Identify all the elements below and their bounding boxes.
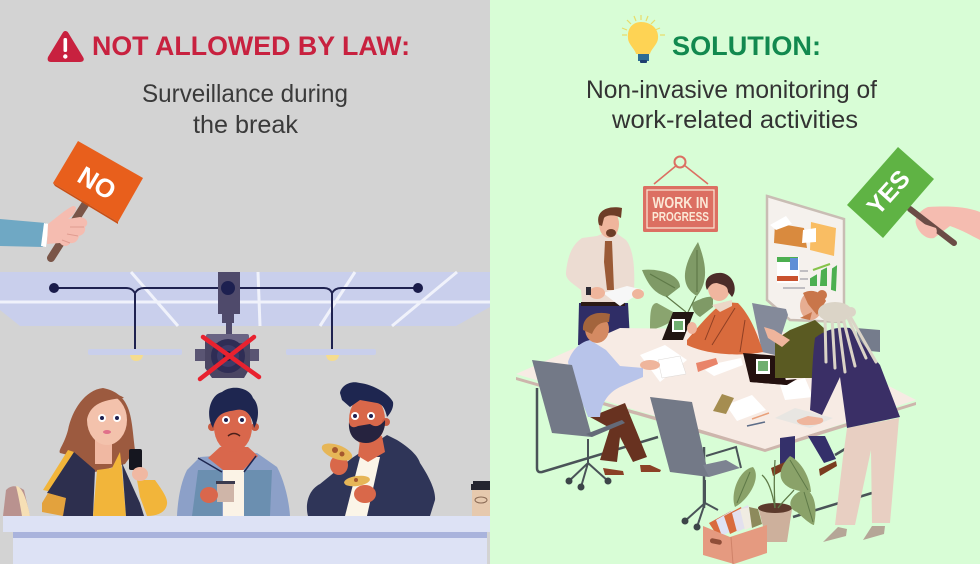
text: non-invasive monitoring xyxy=(586,76,877,134)
papers on table xyxy=(640,345,833,428)
person: seated woman with tablet xyxy=(662,273,763,354)
icon: warning triangle xyxy=(48,31,84,62)
sign: work in progress: WORK IN xyxy=(652,195,708,212)
icon: hand holding YES sign xyxy=(847,147,980,243)
laptop xyxy=(743,353,797,385)
coffee cup xyxy=(471,481,490,516)
text: surveillance during the break xyxy=(142,80,348,139)
person: man with coffee xyxy=(177,388,290,516)
gray chair far right xyxy=(856,328,880,352)
ceiling panel xyxy=(0,272,490,326)
heading: solution: SOLUTION: xyxy=(672,31,821,61)
person: standing man with papers xyxy=(566,207,644,346)
notice board xyxy=(767,196,844,322)
break room table xyxy=(3,516,490,564)
sign: work in progress xyxy=(643,156,718,232)
person: seated man with blue shirt xyxy=(568,313,661,475)
ceiling lamps and rail xyxy=(49,283,423,361)
potted plant with front leaves xyxy=(734,456,815,542)
gray chair back right xyxy=(752,303,788,355)
text: non-invasive monitoring: work-related activities xyxy=(611,106,858,134)
meeting table xyxy=(516,328,916,452)
chair: center xyxy=(650,397,741,530)
text: non-invasive monitoring: Non-invasive monitoring of xyxy=(586,76,877,104)
person: standing woman with dreadlocks xyxy=(797,302,900,542)
chair: left xyxy=(532,360,625,490)
box of books xyxy=(703,505,767,564)
sign: work in progress: PROGRESS xyxy=(652,210,709,224)
table frame xyxy=(537,388,872,517)
heading: not allowed by law: NOT ALLOWED BY LAW: xyxy=(92,31,410,61)
text: surveillance during the break: the break xyxy=(193,111,298,139)
potted plant behind table xyxy=(642,242,713,330)
person: man eating pizza xyxy=(307,382,435,516)
person: man with bun xyxy=(764,290,837,476)
icon: hand holding NO sign: NO xyxy=(73,160,121,206)
icon: hand holding YES sign: YES xyxy=(862,165,916,221)
icon: light bulb xyxy=(622,15,665,63)
panel: not allowed by law xyxy=(0,0,490,564)
icon: surveillance camera crossed out xyxy=(195,272,259,379)
person: woman with phone xyxy=(3,388,167,516)
panel: solution xyxy=(490,0,980,564)
icon: hand holding NO sign xyxy=(0,141,143,258)
text: surveillance during the break: Surveillance during xyxy=(142,80,348,108)
